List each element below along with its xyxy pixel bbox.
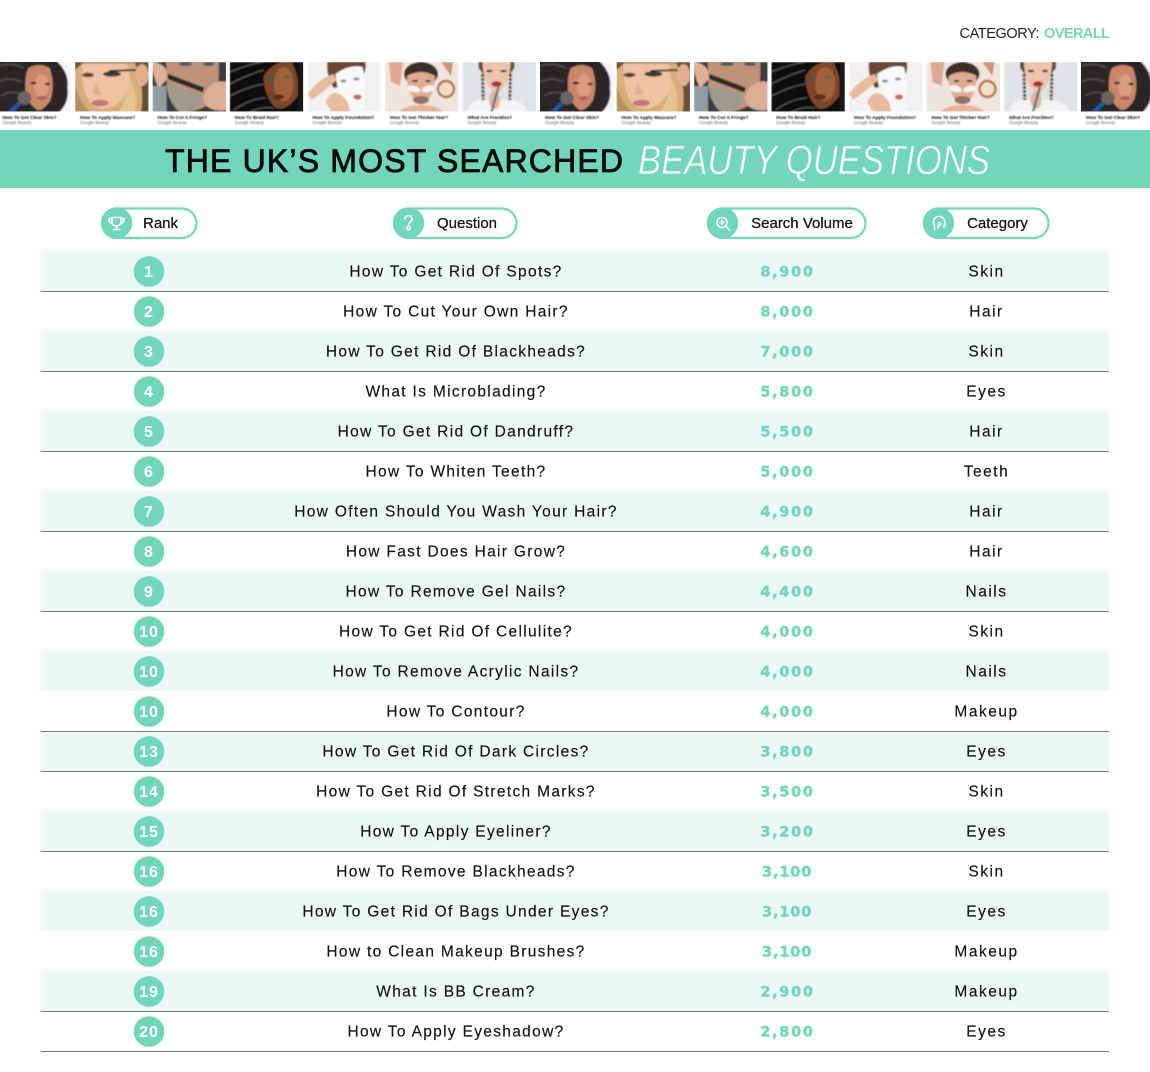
row 2 [41, 296, 1109, 332]
row 15: 3,200 [760, 824, 815, 840]
row 2: How To Cut Your Own Hair? [343, 304, 569, 320]
row 11: 10 [139, 664, 159, 681]
thumbnail: braid hair [230, 62, 304, 125]
row 6: 6 [144, 464, 154, 481]
thumbnail: freckles: Google Beauty [468, 120, 497, 125]
thumbnail: mascara [75, 62, 149, 125]
thumbnail: thicker hair: Google Beauty [390, 120, 420, 125]
row 3: 7,000 [760, 344, 815, 360]
thumbnail: mascara repeat [616, 62, 690, 125]
row 14: 14 [139, 784, 159, 801]
thumbnail: braid hair repeat: Google Beauty [776, 120, 806, 125]
row 15: How To Apply Eyeliner? [360, 824, 552, 840]
row 5: 5 [144, 424, 154, 441]
row 14 [41, 776, 1109, 812]
category label [960, 26, 1110, 42]
row 11: Nails [966, 664, 1007, 680]
row 18: Makeup [954, 944, 1019, 960]
row 5 [41, 411, 1109, 452]
thumbnail: braid hair: How To Braid Hair? [235, 115, 279, 121]
row 2: Hair [969, 304, 1004, 320]
thumbnail: thicker hair: How To Get Thicker Hair? [390, 115, 448, 121]
row 10: Skin [968, 624, 1005, 640]
row 19: Makeup [954, 984, 1019, 1000]
thumbnail: fringe repeat: Google Beauty [699, 120, 729, 125]
column header: rank: Rank [143, 215, 179, 232]
row 6: How To Whiten Teeth? [366, 464, 546, 480]
row 5: 5,500 [760, 424, 815, 440]
row 6: Teeth [964, 464, 1009, 480]
row 19 [41, 971, 1109, 1012]
row 6: 5,000 [760, 464, 815, 480]
thumbnail: freckles repeat: What Are Freckles? [1009, 115, 1054, 121]
row 9: 9 [144, 584, 154, 601]
row 16 [134, 856, 1005, 887]
row 4: 4 [144, 384, 154, 401]
row 7 [41, 491, 1109, 532]
thumbnail: mascara repeat: Google Beauty [622, 120, 651, 125]
thumbnail: braid hair repeat [771, 62, 845, 125]
thumbnail: braid hair: Google Beauty [235, 120, 265, 125]
row 1: Skin [968, 264, 1005, 280]
thumbnail: thicker hair repeat: How To Get Thicker Hair? [932, 115, 990, 121]
thumbnail: clear skin repeat: How To Get Clear Skin? [545, 115, 599, 121]
row 3 [41, 331, 1109, 372]
thumbnail: mascara: How To Apply Mascara? [80, 115, 135, 121]
row 1: 1 [144, 264, 154, 281]
thumbnail: clear skin [0, 60, 72, 125]
row 15 [41, 811, 1109, 852]
thumbnail: clear skin end: Google Beauty [1086, 120, 1116, 125]
row 1: How To Get Rid Of Spots? [349, 264, 563, 280]
row 8: 4,600 [760, 544, 815, 560]
row 10 [134, 616, 1005, 647]
thumbnail: foundation repeat [849, 62, 923, 125]
row 8: Hair [969, 544, 1004, 560]
thumbnail: freckles repeat: Google Beauty [1009, 120, 1039, 125]
row 10: 10 [139, 624, 159, 641]
row 12: How To Contour? [386, 704, 526, 720]
row 19: 2,900 [760, 984, 815, 1000]
row 5: How To Get Rid Of Dandruff? [338, 424, 574, 440]
row 7: How Often Should You Wash Your Hair? [294, 504, 618, 520]
thumbnail: clear skin repeat [538, 60, 614, 125]
row 20: Eyes [966, 1024, 1007, 1040]
row 16: Skin [968, 864, 1005, 880]
row 18: 3,100 [762, 944, 813, 960]
thumbnail: fringe repeat [694, 60, 768, 125]
row 14: Skin [968, 784, 1005, 800]
row 13: Eyes [966, 744, 1007, 760]
row 3: Skin [968, 344, 1005, 360]
thumbnail: mascara: Google Beauty [80, 120, 110, 125]
row 9 [41, 571, 1109, 612]
row 1 [41, 251, 1109, 292]
row 12 [41, 696, 1109, 732]
row 19: 19 [139, 984, 159, 1001]
row 17: Eyes [966, 904, 1007, 920]
row 8: 8 [144, 544, 154, 561]
row 10: 4,000 [760, 624, 815, 640]
row 14: How To Get Rid Of Stretch Marks? [316, 784, 596, 800]
thumbnail: fringe: Google Beauty [158, 120, 187, 125]
row 11: 4,000 [760, 664, 815, 680]
row 2: 8,000 [760, 304, 815, 320]
thumbnail strip [0, 60, 1150, 125]
row 18: 16 [139, 944, 159, 961]
thumbnail: foundation [308, 62, 382, 125]
row 6 [41, 456, 1109, 492]
row 4: Eyes [966, 384, 1007, 400]
row 20: 2,800 [760, 1024, 815, 1040]
row 13: How To Get Rid Of Dark Circles? [322, 744, 590, 760]
category label: CATEGORY: [960, 26, 1040, 42]
thumbnail: fringe: How To Cut A Fringe? [158, 115, 207, 121]
row 3: How To Get Rid Of Blackheads? [326, 344, 586, 360]
row 10: How To Get Rid Of Cellulite? [339, 624, 573, 640]
row 4: What Is Microblading? [365, 384, 547, 400]
row 17: 16 [139, 904, 159, 921]
thumbnail: freckles: What Are Freckles? [468, 115, 512, 121]
row 20: 20 [139, 1024, 159, 1041]
thumbnail: clear skin repeat: Google Beauty [545, 120, 575, 125]
row 16: 16 [139, 864, 159, 881]
row 12: Makeup [954, 704, 1019, 720]
column header: search volume: Search Volume [751, 215, 853, 232]
thumbnail: foundation repeat: How To Apply Foundation? [854, 115, 916, 121]
column header: category: Category [967, 215, 1028, 232]
thumbnail: fringe [152, 60, 226, 125]
thumbnail: foundation: How To Apply Foundation? [312, 115, 374, 121]
row 20: How To Apply Eyeshadow? [347, 1024, 565, 1040]
row 18 [41, 936, 1109, 972]
row 9: How To Remove Gel Nails? [346, 584, 566, 600]
row 17: 3,100 [762, 904, 813, 920]
thumbnail: thicker hair [385, 62, 459, 125]
thumbnail: mascara repeat: How To Apply Mascara? [622, 115, 676, 121]
thumbnail: clear skin: How To Get Clear Skin? [2, 115, 57, 121]
row 12: 10 [139, 704, 159, 721]
thumbnail: braid hair repeat: How To Braid Hair? [776, 115, 821, 121]
title: black part: THE UK’S MOST SEARCHED [165, 143, 623, 179]
row 20 [41, 1016, 1109, 1052]
row 11 [41, 651, 1109, 691]
row 17 [41, 891, 1109, 931]
row 13: 3,800 [760, 744, 815, 760]
row 15: 15 [139, 824, 159, 841]
column header: category [923, 207, 1048, 239]
thumbnail: clear skin: Google Beauty [2, 120, 32, 125]
row 1: 8,900 [760, 264, 815, 280]
column header: search volume [707, 207, 866, 239]
row 9: Nails [966, 584, 1007, 600]
thumbnail: freckles [462, 62, 536, 125]
row 16: 3,100 [762, 864, 813, 880]
row 13 [41, 732, 1109, 772]
thumbnail: freckles repeat [1004, 62, 1078, 125]
row 4 [41, 376, 1109, 412]
row 11: How To Remove Acrylic Nails? [333, 664, 579, 680]
row 12: 4,000 [760, 704, 815, 720]
thumbnail: thicker hair repeat [926, 62, 1000, 125]
icon: question mark [405, 216, 412, 230]
row 3: 3 [144, 344, 154, 361]
icon: trophy [109, 218, 124, 230]
thumbnail: foundation repeat: Google Beauty [854, 120, 884, 125]
row 18: How to Clean Makeup Brushes? [326, 944, 586, 960]
thumbnail: thicker hair repeat: Google Beauty [932, 120, 961, 125]
icon: head [934, 216, 946, 230]
row 7: 7 [144, 504, 154, 521]
row 17: How To Get Rid Of Bags Under Eyes? [302, 904, 610, 920]
thumbnail: fringe repeat: How To Cut A Fringe? [699, 115, 749, 121]
row 2: 2 [144, 304, 154, 321]
thumbnail: clear skin end: How To Get Clear Skin? [1086, 115, 1140, 121]
category label: OVERALL [1044, 26, 1110, 42]
row 16: How To Remove Blackheads? [336, 864, 576, 880]
column header: question: Question [437, 215, 497, 232]
row 8 [41, 536, 1109, 572]
row 9: 4,400 [760, 584, 815, 600]
title banner [0, 130, 1150, 188]
row 8: How Fast Does Hair Grow? [346, 544, 566, 560]
title: handwritten part: BEAUTY QUESTIONS [638, 137, 990, 183]
row 4: 5,800 [760, 384, 815, 400]
column header: question [393, 207, 516, 239]
column header: rank [101, 207, 196, 239]
row 7: 4,900 [760, 504, 815, 520]
row 15: Eyes [966, 824, 1007, 840]
thumbnail: foundation: Google Beauty [312, 120, 342, 125]
row 19: What Is BB Cream? [376, 984, 536, 1000]
row 7: Hair [969, 504, 1004, 520]
row 13: 13 [139, 744, 159, 761]
row 14: 3,500 [760, 784, 815, 800]
thumbnail: clear skin end [1079, 60, 1150, 125]
icon: magnifier [717, 218, 730, 230]
row 5: Hair [969, 424, 1004, 440]
